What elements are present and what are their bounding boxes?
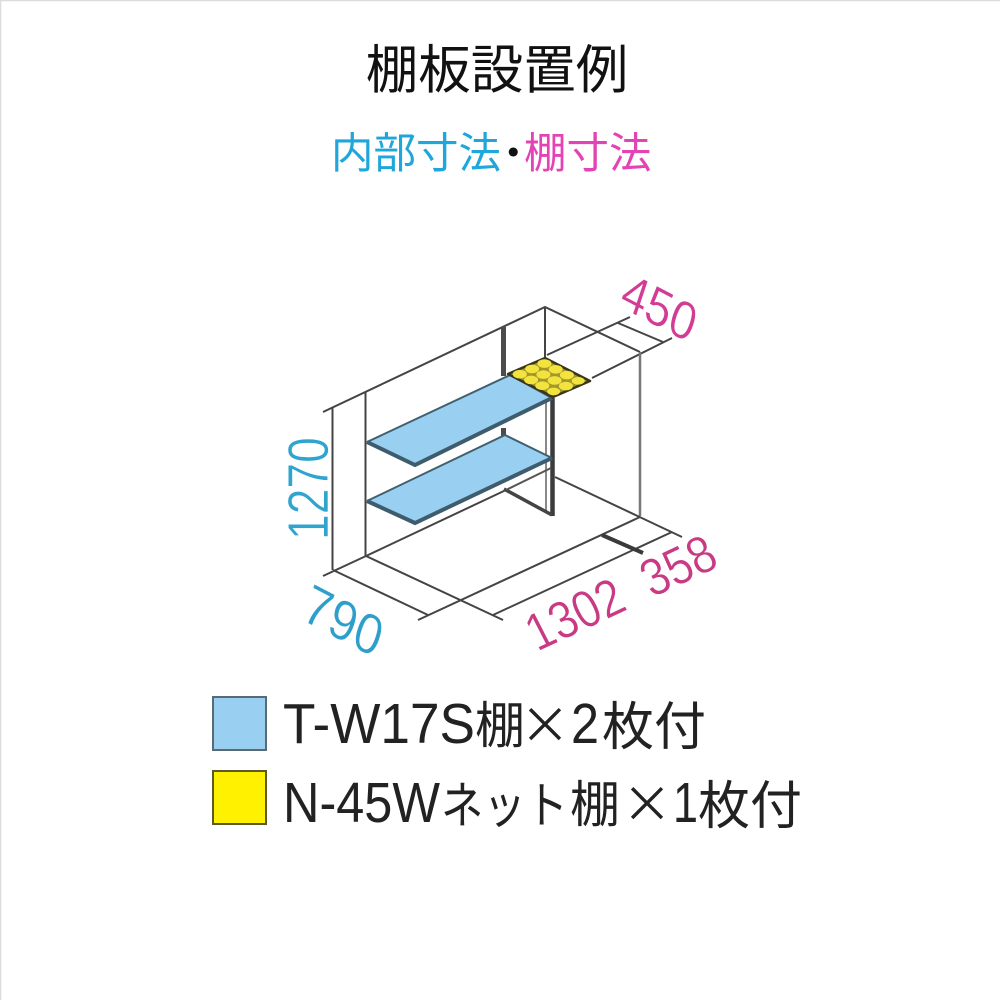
storage diagram [277,261,726,670]
wireframe outline [323,307,682,620]
legend: yellow net shelf [213,765,802,837]
legend: blue shelf: 2 [571,692,599,756]
subtitle: inner and shelf dimensions: ・ [492,131,535,178]
title: 棚板設置例 [366,41,628,100]
legend: blue shelf [213,686,706,758]
subtitle: inner and shelf dimensions [331,131,652,178]
legend: yellow net shelf: ネット [441,778,568,834]
legend: blue shelf: × [520,686,570,758]
dimension 1302: 1302 [515,566,634,662]
legend: blue shelf: 棚 [475,698,525,754]
front post and brace [504,398,552,516]
dimension 790: 790 [296,573,391,670]
blue shelf upper [367,375,552,465]
legend: yellow net shelf: 棚 [570,777,620,833]
legend: yellow net shelf: N-45W [283,771,440,835]
floor rail [602,535,643,553]
legend: yellow net shelf: 枚付 [698,778,802,836]
legend: blue shelf: T-W17S [283,692,475,756]
legend [213,686,802,837]
legend: yellow net shelf: × [622,765,672,837]
dimension 358: 358 [630,523,726,608]
rear post [501,327,506,440]
subtitle: inner and shelf dimensions: 棚寸法 [524,131,652,178]
legend: yellow net shelf: 1 [673,771,698,835]
dimension 1270: 1270 [277,437,341,540]
blue shelf lower [367,435,552,523]
legend: blue shelf: 枚付 [602,699,706,757]
dimension 450: 450 [614,261,704,354]
yellow net shelf [508,358,590,397]
subtitle: inner and shelf dimensions: 内部寸法 [331,131,501,178]
